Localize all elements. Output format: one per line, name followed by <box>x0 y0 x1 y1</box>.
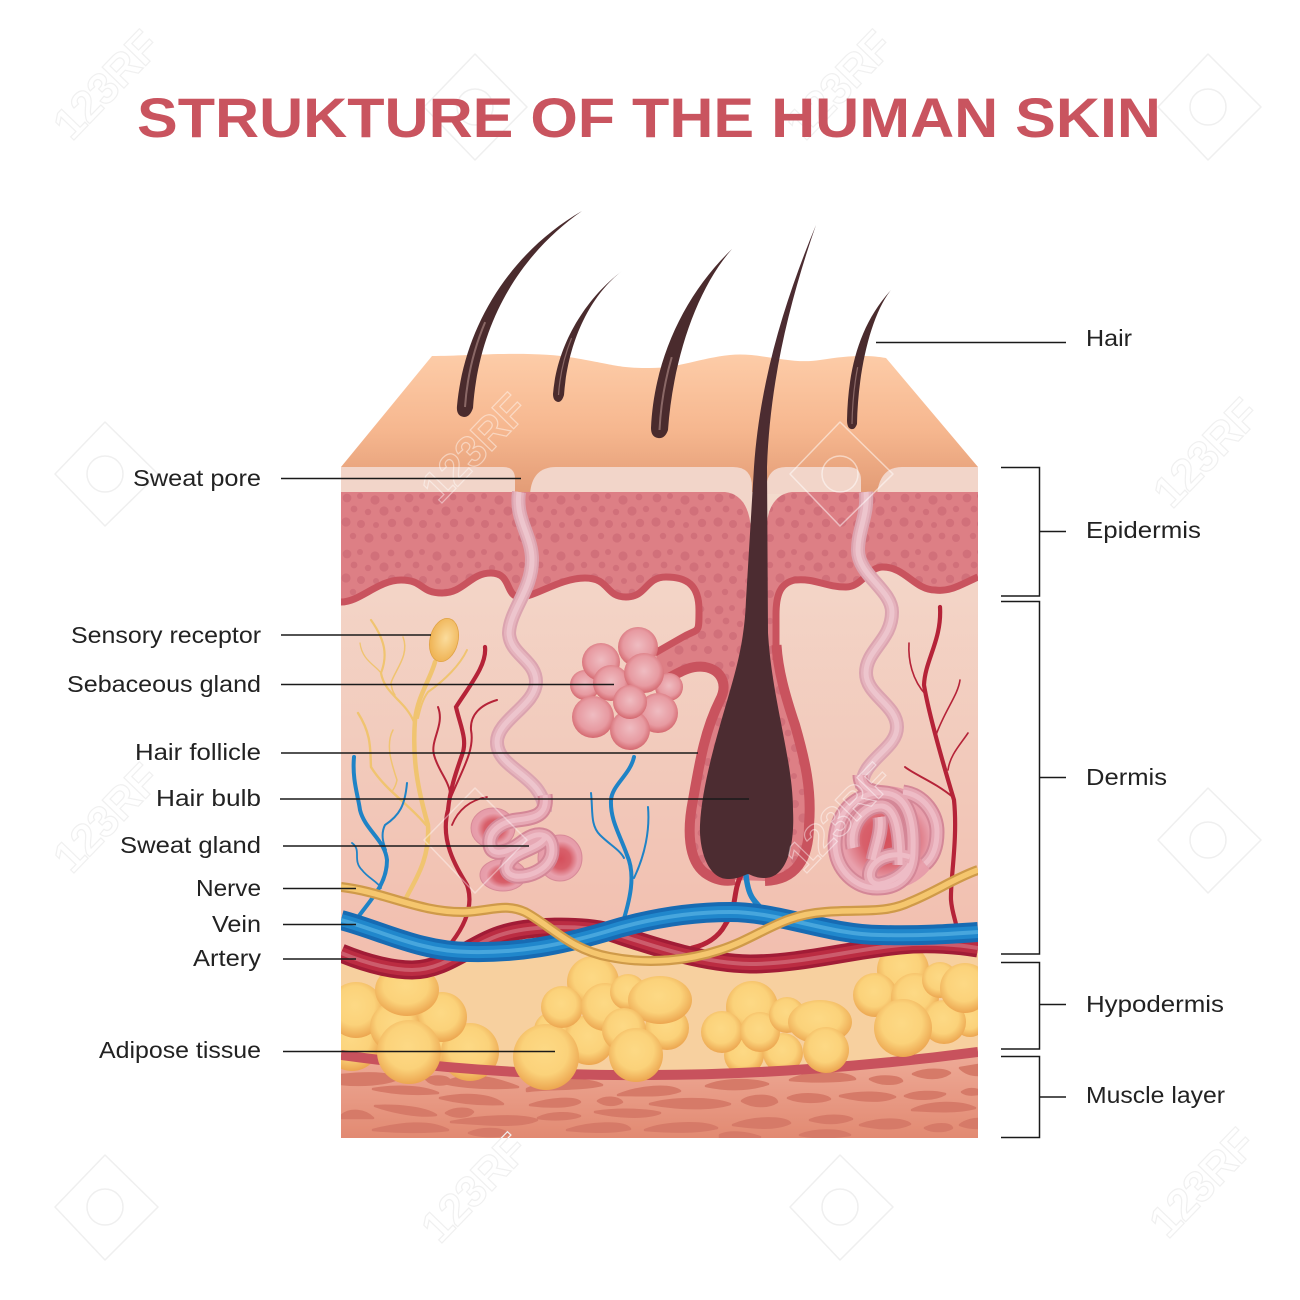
label: Sebaceous gland: Sebaceous gland <box>67 671 261 697</box>
label: Hypodermis bracket <box>1001 962 1224 1049</box>
stratum corneum band <box>341 467 978 492</box>
label: Nerve: Nerve <box>196 875 261 901</box>
watermark 123RF right: 123RF <box>1144 389 1269 517</box>
sensory receptor <box>429 618 459 662</box>
hair shaft 2 <box>553 271 622 402</box>
label: Hair bulb: Hair bulb <box>156 785 261 811</box>
panel: skin cross-section <box>324 211 990 1138</box>
label: Adipose tissue: Adipose tissue <box>99 1037 261 1063</box>
branching blood vessels blue <box>352 757 768 925</box>
sweat gland right <box>829 775 941 890</box>
adipose tissue clusters <box>328 944 990 1090</box>
label: Vein: Vein <box>212 911 261 937</box>
nerve <box>341 870 978 961</box>
sweat gland left <box>471 795 582 891</box>
branching blood vessels red <box>433 607 968 948</box>
label: Hair follicle: Hair follicle <box>135 739 261 765</box>
hypodermis background <box>341 927 978 1070</box>
label: Hair: Hair <box>1086 325 1132 351</box>
label: Epidermis bracket <box>1001 468 1201 596</box>
top skin surface <box>341 354 978 492</box>
label: Artery: Artery <box>193 945 262 971</box>
label: Sensory receptor: Sensory receptor <box>71 622 261 648</box>
label: Sweat pore: Sweat pore <box>133 465 261 491</box>
adipose tissue behind membrane <box>324 1012 803 1081</box>
label: Epidermis bracket: Epidermis <box>1086 517 1201 543</box>
sweat duct left <box>497 492 545 812</box>
artery <box>341 927 978 970</box>
hair shaft 5 <box>847 290 891 429</box>
vein <box>341 912 978 952</box>
hair follicle shaft and bulb <box>700 225 816 879</box>
dermis background <box>341 490 978 980</box>
label: Sweat gland: Sweat gland <box>120 832 261 858</box>
yellow nerve tree <box>358 620 467 900</box>
watermark 123RF top left: 123RF <box>44 21 169 149</box>
sweat duct right <box>858 492 897 788</box>
sebaceous gland <box>570 627 683 750</box>
watermark 123RF on gland: 123RF <box>777 754 902 882</box>
watermark 123RF on epidermis: 123RF <box>412 384 537 512</box>
hair shaft 1 <box>457 211 582 417</box>
membrane between hypodermis and muscle <box>341 1052 978 1075</box>
watermark 123RF left: 123RF <box>44 754 169 882</box>
watermark 123RF lower center: 123RF <box>412 1124 537 1252</box>
watermark 123RF top center: 123RF <box>777 21 902 149</box>
epidermis with hair follicle <box>341 492 978 881</box>
label: Dermis bracket: Dermis <box>1086 764 1167 790</box>
title: STRUKTURE OF THE HUMAN SKIN <box>137 86 1161 149</box>
watermark 123RF lower right: 123RF <box>1140 1119 1265 1247</box>
muscle layer <box>341 1052 978 1138</box>
label: Muscle layer bracket: Muscle layer <box>1086 1082 1225 1108</box>
label: Hypodermis bracket: Hypodermis <box>1086 991 1224 1017</box>
label: Muscle layer bracket <box>1001 1056 1225 1138</box>
hair shaft 3 <box>651 249 732 438</box>
label: Dermis bracket <box>1001 602 1167 954</box>
